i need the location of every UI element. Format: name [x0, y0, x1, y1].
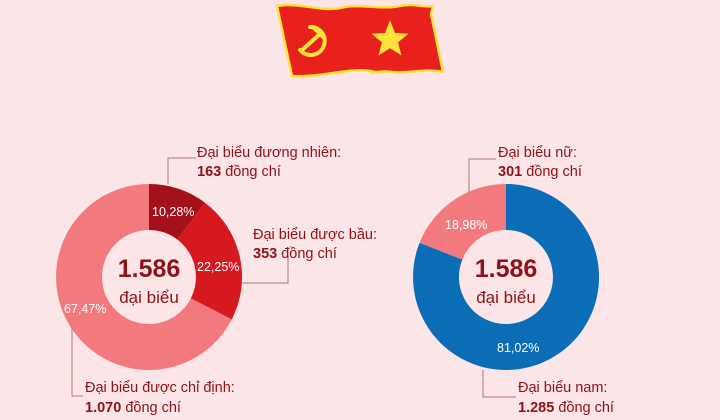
chart: donut left — [56, 184, 242, 370]
percent labels — [64, 205, 239, 316]
callout labels: 353 đồng chí — [253, 246, 337, 262]
callout labels — [85, 145, 614, 416]
center text: đại biểu — [119, 288, 179, 307]
percent labels: 22,25% — [197, 260, 239, 274]
center text: 1.586 — [118, 255, 180, 283]
leader lines — [72, 158, 516, 397]
callout labels: Đại biểu đương nhiên: — [197, 145, 341, 161]
chart: donut right: 1.586 — [475, 255, 537, 283]
callout labels: Đại biểu nam: — [518, 380, 607, 396]
callout labels: 301 đồng chí — [498, 164, 582, 180]
percent labels: 10,28% — [152, 205, 194, 219]
icon: flag — [277, 5, 443, 76]
icon: star — [372, 20, 408, 56]
callout labels: 1.285 đồng chí — [518, 400, 614, 416]
callout labels: Đại biểu nữ: — [498, 145, 577, 161]
callout labels: 163 đồng chí — [197, 164, 281, 180]
chart: donut right: 18,98% — [445, 218, 487, 232]
icon: hammer and sickle — [300, 27, 325, 55]
callout labels: 1.070 đồng chí — [85, 400, 181, 416]
chart: donut right: đại biểu — [476, 288, 536, 307]
percent labels: 67,47% — [64, 302, 106, 316]
chart: donut right — [413, 184, 599, 370]
chart: donut right: 81,02% — [497, 341, 539, 355]
callout labels: Đại biểu được chỉ định: — [85, 380, 235, 396]
callout labels: Đại biểu được bầu: — [253, 227, 377, 243]
center text — [118, 255, 180, 307]
